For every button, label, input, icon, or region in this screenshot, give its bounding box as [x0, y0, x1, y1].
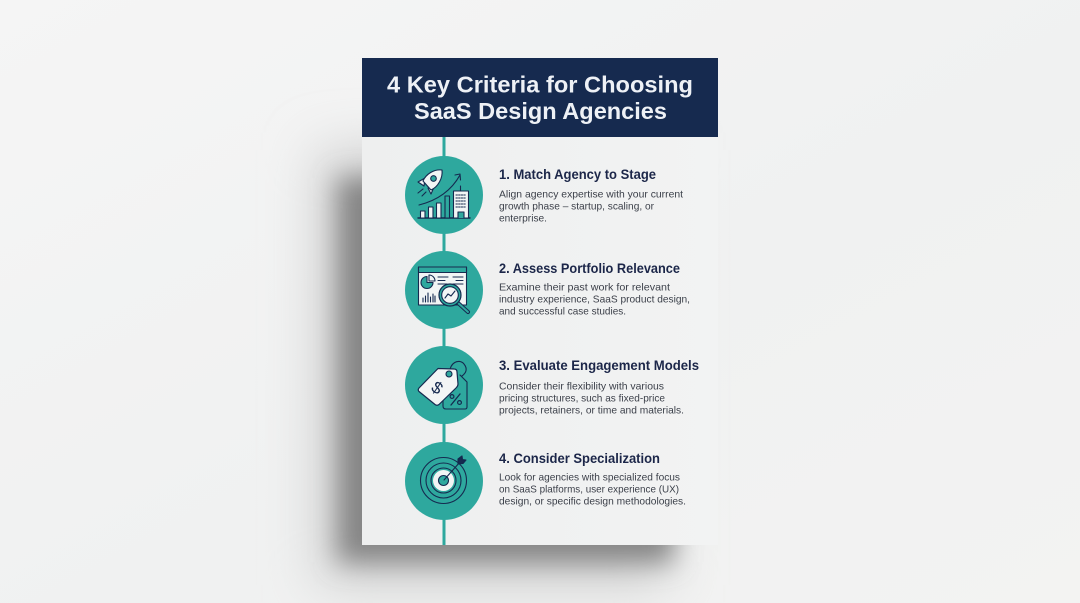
step 2 text: and successful case studies. — [499, 306, 626, 318]
step 2 text — [499, 260, 690, 318]
step 2 text: Examine their past work for relevant — [499, 282, 670, 294]
header band — [362, 58, 718, 137]
step 3 text: 3. Evaluate Engagement Models — [499, 357, 699, 373]
step 1 text: enterprise. — [499, 212, 547, 224]
step 3 text: Consider their flexibility with various — [499, 380, 664, 392]
card shadow — [318, 150, 673, 585]
step 2 text: industry experience, SaaS product design, — [499, 294, 690, 306]
step 4 text — [499, 450, 686, 508]
circle icon 2: portfolio and magnifier — [405, 251, 483, 329]
title: SaaS Design Agencies — [414, 98, 667, 124]
step 4 text: 4. Consider Specialization — [499, 450, 660, 466]
step 3 text: projects, retainers, or time and materials. — [499, 404, 684, 416]
step 3 text — [499, 357, 699, 416]
title — [387, 72, 693, 124]
step 2 text: 2. Assess Portfolio Relevance — [499, 260, 680, 276]
title: 4 Key Criteria for Choosing — [387, 72, 693, 98]
step 1 text: 1. Match Agency to Stage — [499, 166, 656, 182]
circle icon 4: target — [405, 442, 483, 520]
step 1 text: growth phase – startup, scaling, or — [499, 200, 654, 212]
step 3 text: pricing structures, such as fixed-price — [499, 392, 665, 404]
circle icon 1: rocket and growth — [405, 156, 483, 234]
circle icon 3: price tags: $ — [428, 378, 447, 399]
step 4 text: Look for agencies with specialized focus — [499, 472, 680, 484]
poster card — [362, 58, 718, 545]
step 4 text: design, or specific design methodologies. — [499, 496, 686, 508]
step 1 text: Align agency expertise with your current — [499, 188, 683, 200]
timeline line — [442, 137, 446, 545]
step 4 text: on SaaS platforms, user experience (UX) — [499, 484, 679, 496]
circle icon 3: price tags — [405, 346, 483, 424]
step 1 text — [499, 166, 683, 224]
